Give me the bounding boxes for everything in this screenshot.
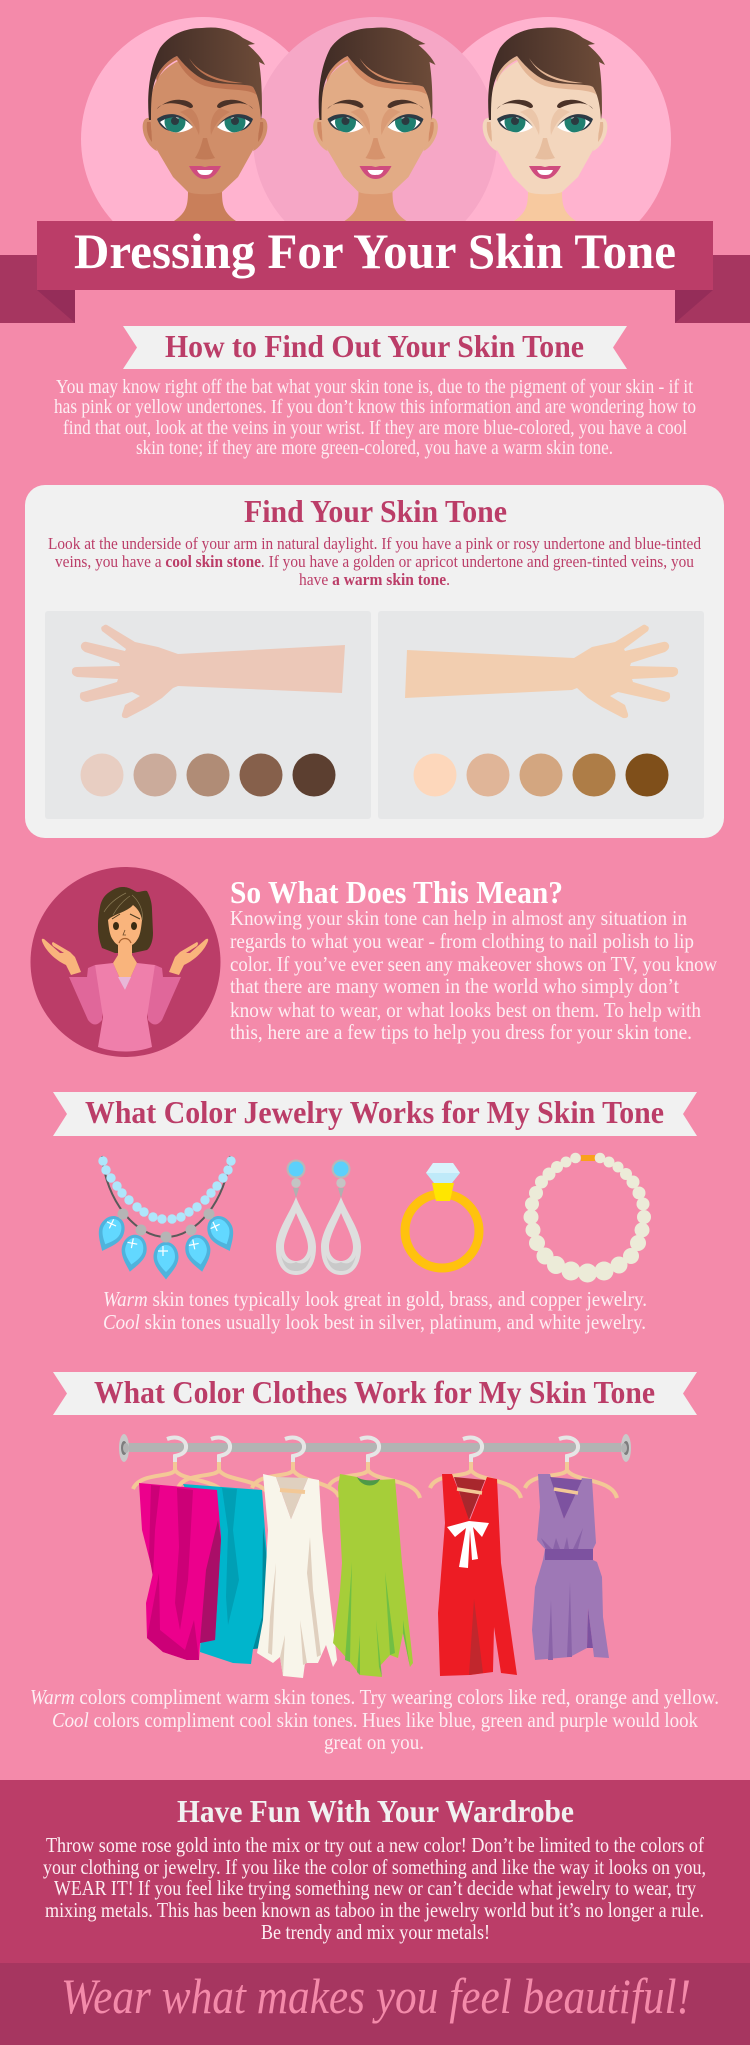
paragraph: what it means: this, here are a few tips to help you dress for your skin tone. xyxy=(230,1020,692,1044)
garment: green dress xyxy=(333,1474,413,1677)
garment: magenta xyxy=(139,1483,221,1660)
cool tone card xyxy=(45,611,371,819)
warm swatches xyxy=(414,754,668,796)
neck xyxy=(113,940,137,990)
backdrop circles xyxy=(81,17,671,261)
blouse xyxy=(95,963,155,1052)
hair xyxy=(98,887,153,953)
paragraph: what it means xyxy=(230,906,717,1044)
rod xyxy=(119,1434,631,1462)
paragraph: what it means: know what to wear, or what looks best on them. To help with xyxy=(230,998,701,1022)
icon: necklace xyxy=(91,1156,241,1280)
intro paragraph: skin tone; if they are more green-colored, you have a warm skin tone. xyxy=(136,438,613,459)
banner heading: jewelry: What Color Jewelry Works for My Skin Tone xyxy=(85,1094,664,1130)
banner heading: how to find out: How to Find Out Your Skin Tone xyxy=(165,328,584,364)
closing slogan band xyxy=(0,1963,750,2045)
panel heading: Have Fun With Your Wardrobe xyxy=(177,1793,574,1829)
panel: have fun xyxy=(0,1780,750,1963)
title: Dressing For Your Skin Tone xyxy=(74,223,676,279)
hair strands xyxy=(104,893,142,920)
jewelry caption: Cool skin tones usually look best in silver, platinum, and white jewelry. xyxy=(103,1310,646,1334)
illustration: confused woman xyxy=(30,867,220,1057)
clothes caption: great on you. xyxy=(324,1730,424,1754)
portrait: light skin tone xyxy=(483,27,607,221)
portrait: dark skin tone xyxy=(143,27,267,221)
panel instructions: veins, you have a cool skin stone. If you have a golden or apricot undertone and green-tinted veins, you xyxy=(55,552,694,571)
jewelry caption: Warm skin tones typically look great in gold, brass, and copper jewelry. xyxy=(103,1287,647,1311)
banner heading: clothes: What Color Clothes Work for My Skin Tone xyxy=(94,1374,655,1410)
portrait: medium skin tone xyxy=(313,27,438,221)
cool swatches xyxy=(80,754,336,796)
panel: find your skin tone xyxy=(25,485,724,838)
panel heading: Find Your Skin Tone xyxy=(244,493,507,529)
panel instructions xyxy=(48,534,701,589)
paragraph: what it means: that there are many women in the world who simply don’t xyxy=(230,974,679,998)
face xyxy=(108,905,142,947)
icon: warm arm xyxy=(405,625,678,718)
facial features xyxy=(112,914,140,943)
sleeves xyxy=(69,965,181,1024)
panel paragraph: Be trendy and mix your metals! xyxy=(261,1920,490,1944)
arms xyxy=(42,939,208,975)
clothes rack xyxy=(119,1434,631,1678)
icon: earrings xyxy=(276,1160,361,1275)
icon: ring xyxy=(405,1163,479,1268)
panel instructions: have a warm skin tone. xyxy=(299,570,450,589)
garment: teal xyxy=(183,1484,268,1664)
bow xyxy=(447,1521,489,1568)
icon: cool arm xyxy=(72,625,345,718)
jewelry caption xyxy=(103,1287,647,1334)
panel paragraph xyxy=(43,1833,706,1944)
hangers xyxy=(133,1438,617,1498)
clothes caption xyxy=(30,1685,719,1754)
garment: purple dress xyxy=(532,1474,609,1660)
garment: white dress xyxy=(257,1474,337,1678)
warm tone card xyxy=(378,611,704,819)
header: three portraits xyxy=(81,17,671,261)
garment: red dress xyxy=(438,1474,517,1676)
icon: pearl necklace xyxy=(524,1153,651,1282)
paragraph: what it means: Knowing your skin tone can help in almost any situation in xyxy=(230,906,687,930)
inner shirt xyxy=(118,977,131,990)
paragraph: what it means: regards to what you wear - from clothing to nail polish to lip xyxy=(230,929,694,953)
heading: so what does this mean: So What Does This Mean? xyxy=(230,874,563,910)
title ribbon xyxy=(0,221,750,323)
intro paragraph xyxy=(54,377,696,459)
